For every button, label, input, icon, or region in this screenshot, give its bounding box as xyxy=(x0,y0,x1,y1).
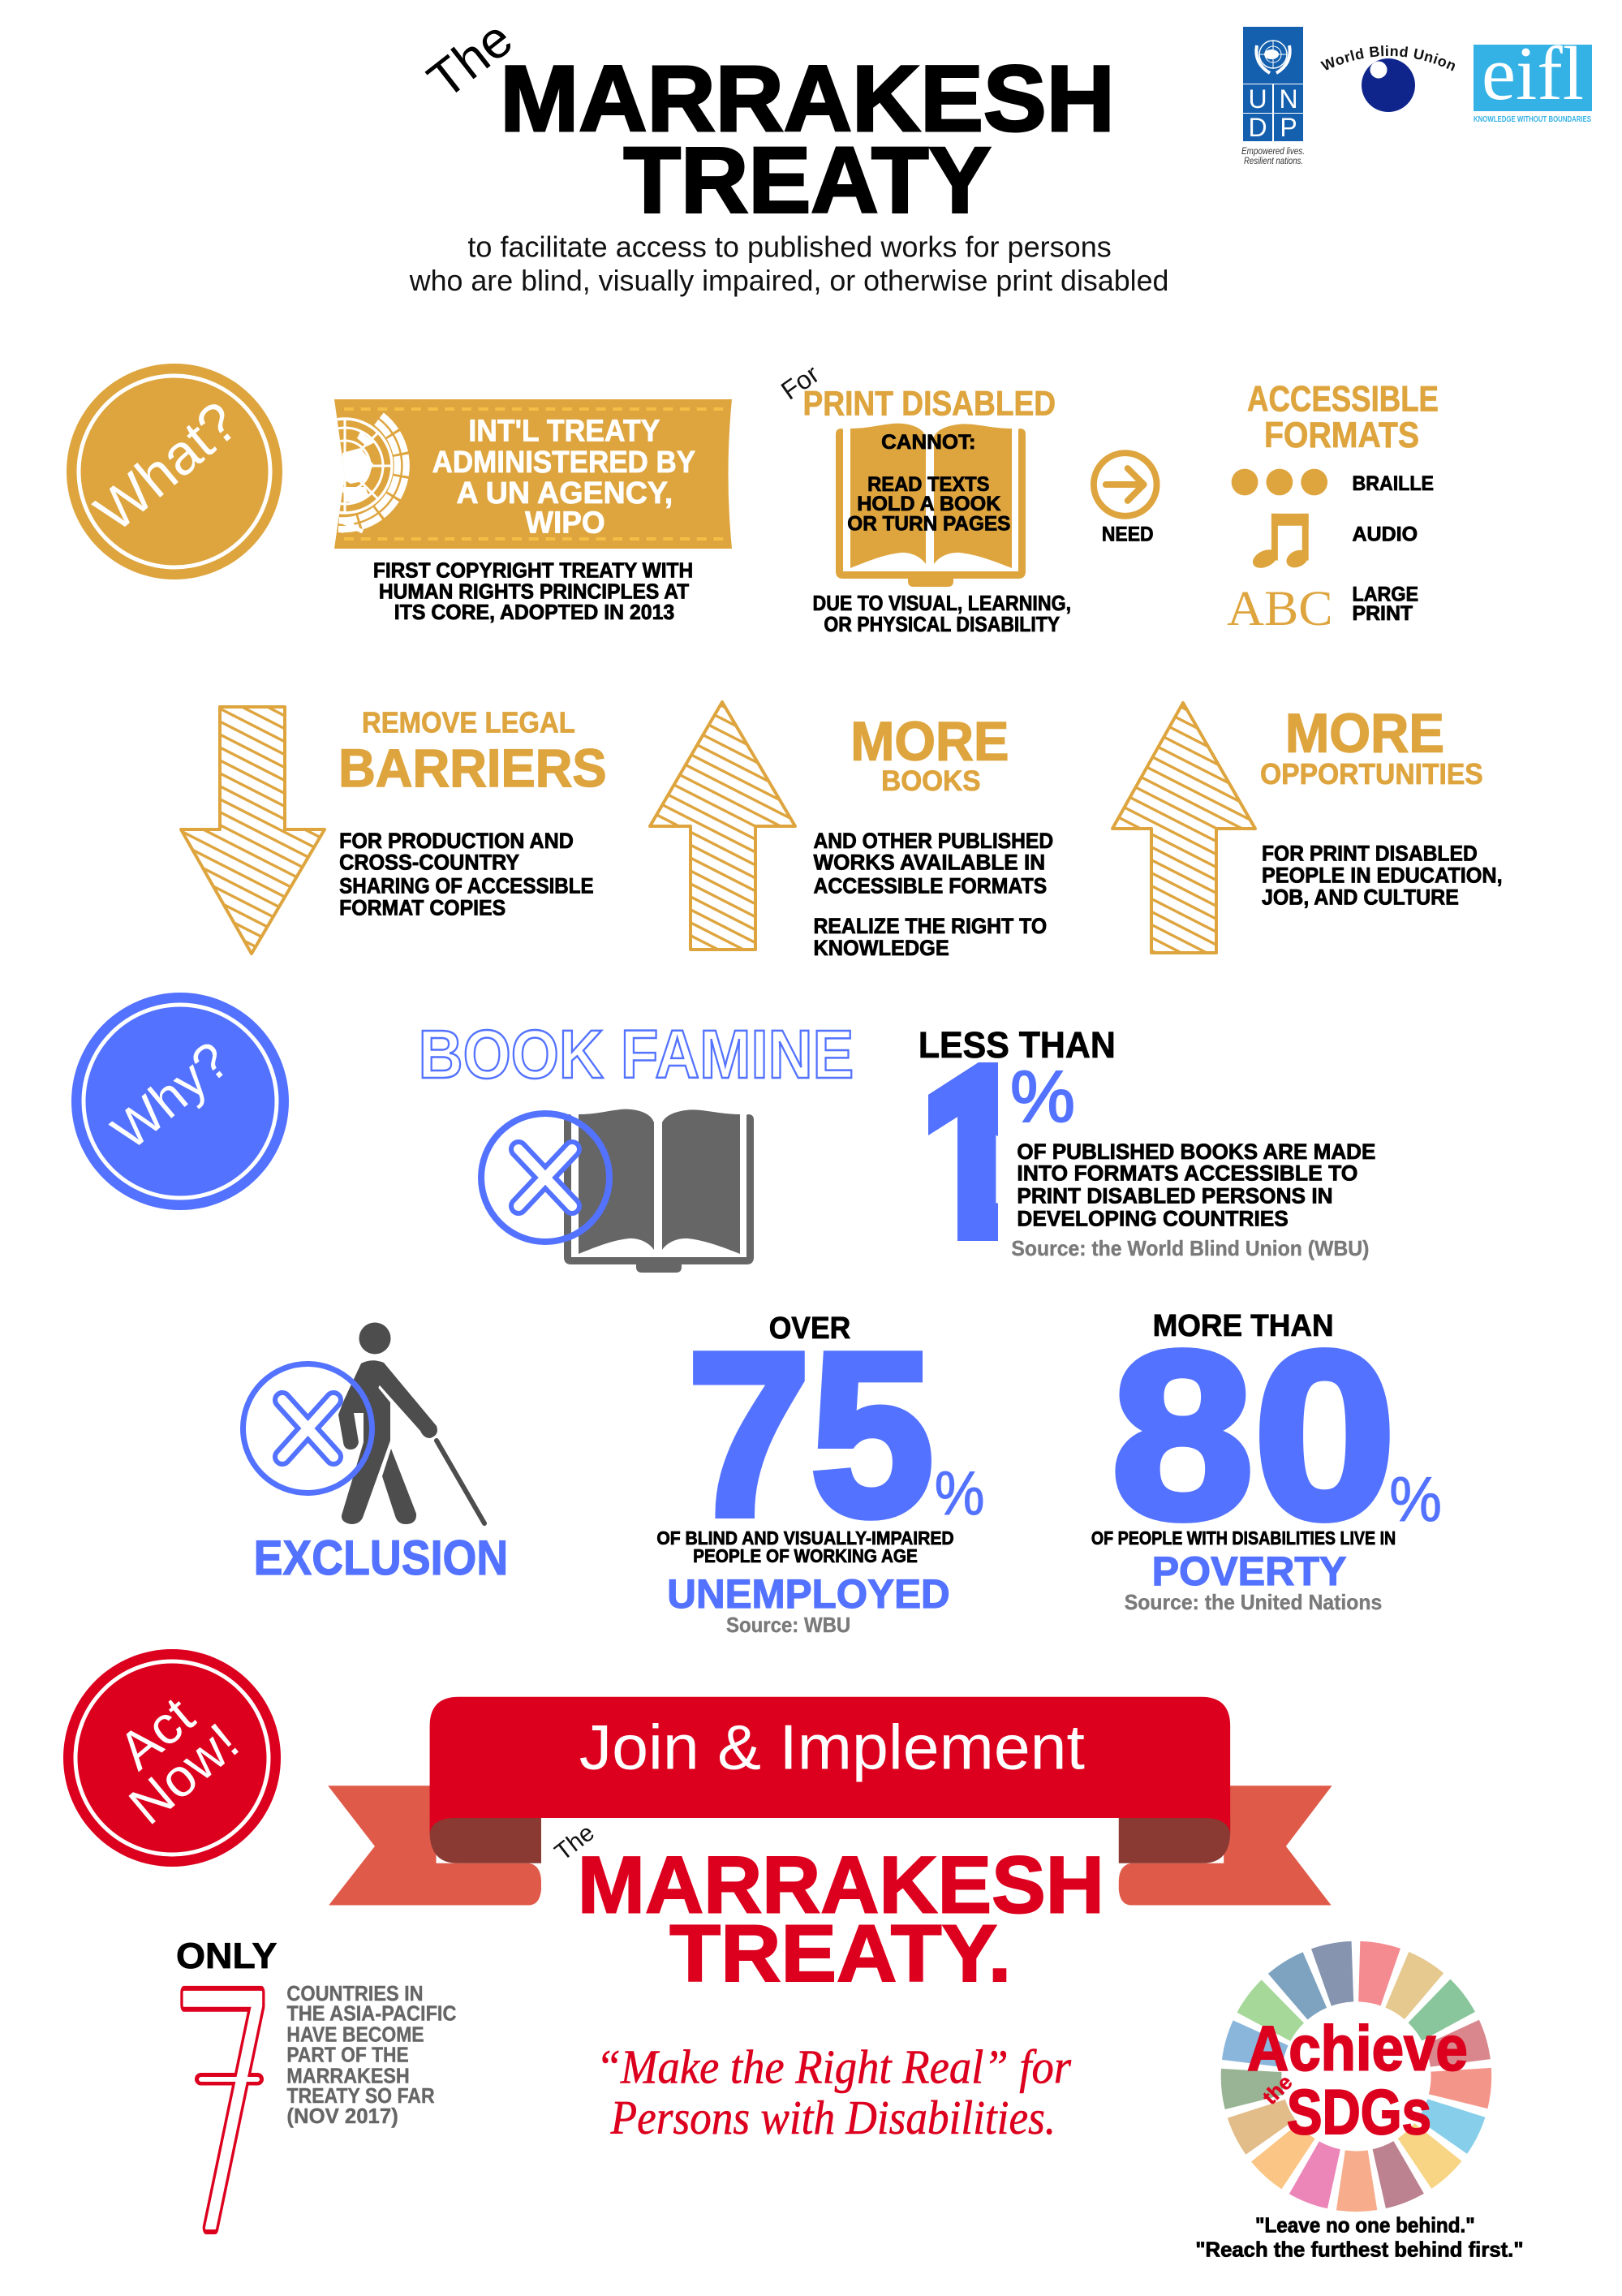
text: cannot list xyxy=(847,431,1010,536)
stat: 7 outlined: 7 xyxy=(170,1928,281,2296)
slogan: “Make the Right Real” for xyxy=(596,2040,1072,2093)
slogan: Persons with Disabilities. xyxy=(610,2091,1056,2144)
text: seven countries: PART OF THE xyxy=(286,2044,409,2066)
stat: 1 percent: % xyxy=(1010,1057,1075,1138)
ribbon text: ADMINISTERED BY xyxy=(432,446,695,480)
text: opportunities detail xyxy=(1262,842,1503,909)
text: cannot list: CANNOT: xyxy=(881,431,976,454)
subtitle xyxy=(409,230,1168,297)
logo: World Blind Union: World Blind Union xyxy=(1320,45,1456,71)
title red xyxy=(578,1840,1104,1999)
panel: act now xyxy=(63,1649,1524,2296)
text: seven countries: MARRAKESH xyxy=(286,2065,410,2087)
logo: UNDP: D xyxy=(1248,113,1267,142)
ribbon text: Join & Implement xyxy=(579,1712,1085,1782)
label: large print xyxy=(1352,583,1418,625)
ribbon text: INT'L TREATY xyxy=(468,414,660,448)
heading: remove legal barriers: REMOVE LEGAL xyxy=(362,706,575,739)
logo: UNDP: Resilient nations. xyxy=(1244,155,1303,166)
stat: 1 percent: 1 xyxy=(891,1013,1030,1294)
text: seven countries: COUNTRIES IN xyxy=(286,1983,424,2005)
stat: 80 percent: % xyxy=(1389,1465,1442,1535)
source: WBU: Source: the World Blind Union (WBU) xyxy=(1011,1238,1369,1260)
label: The small: The xyxy=(550,1819,600,1866)
heading: more books: BOOKS xyxy=(881,765,981,797)
source: United Nations: Source: the United Nations xyxy=(1125,1592,1382,1614)
stat: 7 outlined: 7 xyxy=(170,1928,281,2296)
heading: book famine: BOOK FAMINE xyxy=(419,1016,854,1092)
stat: 75 percent: 75 xyxy=(687,1305,934,1564)
panel: what xyxy=(67,359,1439,636)
text: copyright treaty note: ITS CORE, ADOPTED IN 2013 xyxy=(394,601,674,624)
text: copyright treaty note xyxy=(373,559,693,624)
text: seven countries: THE ASIA-PACIFIC xyxy=(286,2003,456,2026)
icon: music note xyxy=(1250,514,1311,571)
text: 75 detail: OF BLIND AND VISUALLY-IMPAIRED xyxy=(656,1527,954,1549)
heading: more opportunities: MORE xyxy=(1285,703,1444,764)
heading: accessible formats: ACCESSIBLE xyxy=(1247,378,1439,419)
badge: What?: What? xyxy=(83,390,250,544)
heading: remove legal barriers: BARRIERS xyxy=(338,739,607,798)
logo: UNDP: N xyxy=(1279,84,1298,114)
logo: EIFL: eifl xyxy=(1482,32,1584,116)
subtitle: who are blind, visually impaired, or otherwise print disabled xyxy=(409,265,1168,297)
text: opportunities detail: JOB, AND CULTURE xyxy=(1262,885,1459,909)
icon: UN emblem xyxy=(337,412,410,534)
arrow: up opportunities xyxy=(1112,703,1255,953)
text: books detail: AND OTHER PUBLISHED xyxy=(813,829,1053,853)
icon: X circle xyxy=(481,1114,609,1242)
text: due to disability: OR PHYSICAL DISABILITY xyxy=(824,614,1060,636)
panel: effects xyxy=(181,702,1503,960)
heading: accessible formats: FORMATS xyxy=(1264,415,1419,455)
text: 1 percent detail: OF PUBLISHED BOOKS ARE MADE xyxy=(1017,1139,1375,1164)
heading: unemployed: UNEMPLOYED xyxy=(667,1571,950,1617)
label: large print: PRINT xyxy=(1352,602,1413,625)
ribbon text xyxy=(432,414,695,541)
logo: UNDP: U xyxy=(1248,84,1267,114)
text: seven countries: (NOV 2017) xyxy=(286,2105,398,2128)
label: less than: LESS THAN xyxy=(919,1024,1116,1066)
text: barriers detail: CROSS-COUNTRY xyxy=(339,851,519,875)
text: barriers detail: SHARING OF ACCESSIBLE xyxy=(339,873,594,898)
text: copyright treaty note: HUMAN RIGHTS PRINCIPLES AT xyxy=(379,580,689,603)
text: seven countries xyxy=(286,1983,456,2128)
text: barriers detail: FORMAT COPIES xyxy=(339,895,506,920)
icon: open book grey xyxy=(564,1109,754,1273)
arrow: down xyxy=(181,707,325,954)
text: 75 detail xyxy=(656,1527,954,1566)
quote: "Leave no one behind." xyxy=(1255,2214,1475,2237)
source: WBU short: Source: WBU xyxy=(726,1614,850,1637)
logo: UNDP: Empowered lives. xyxy=(1241,145,1305,157)
heading: more opportunities: OPPORTUNITIES xyxy=(1260,758,1483,790)
ribbon text: A UN AGENCY, xyxy=(456,476,673,510)
logo: UNDP xyxy=(1241,27,1305,166)
label: need: NEED xyxy=(1102,523,1154,546)
heading: exclusion: EXCLUSION xyxy=(254,1531,508,1585)
badge: Act Now! xyxy=(63,1649,281,1867)
heading: more opportunities xyxy=(1260,703,1483,790)
stat: 75 percent: % xyxy=(935,1459,985,1528)
text: books detail: ACCESSIBLE FORMATS xyxy=(813,873,1047,898)
text: opportunities detail: FOR PRINT DISABLED xyxy=(1262,842,1478,866)
text: cannot list: READ TEXTS xyxy=(867,473,989,496)
text: 75 detail: PEOPLE OF WORKING AGE xyxy=(693,1545,918,1566)
text: cannot list: OR TURN PAGES xyxy=(847,513,1010,536)
quote: "Reach the furthest behind first." xyxy=(1195,2238,1524,2261)
heading: achieve the SDGs: the xyxy=(1258,2071,1297,2109)
badge: Why? xyxy=(71,993,289,1210)
text: due to disability xyxy=(812,592,1071,636)
heading: remove legal barriers xyxy=(338,706,607,798)
logos xyxy=(1241,27,1592,166)
heading: more books: MORE xyxy=(850,711,1009,772)
icon: person with cane xyxy=(338,1323,484,1524)
icon: open book gold xyxy=(836,424,1026,587)
text: 80 detail: OF PEOPLE WITH DISABILITIES LIVE IN xyxy=(1091,1527,1396,1549)
text: barriers detail xyxy=(339,829,594,920)
icon: braille dots xyxy=(1232,469,1327,495)
logo: World Blind Union xyxy=(1320,45,1456,112)
label: only: ONLY xyxy=(176,1936,278,1976)
heading: accessible formats xyxy=(1247,378,1439,455)
text: cannot list: HOLD A BOOK xyxy=(857,493,1000,515)
header xyxy=(409,10,1168,297)
icon: ABC large print: ABC xyxy=(1227,581,1333,636)
label: audio: AUDIO xyxy=(1352,523,1418,546)
text: due to disability: DUE TO VISUAL, LEARNING, xyxy=(812,592,1071,615)
title: Marrakesh: MARRAKESH xyxy=(500,46,1115,151)
text: barriers detail: FOR PRODUCTION AND xyxy=(339,829,574,853)
title red: MARRAKESH xyxy=(578,1840,1104,1930)
badge: Act Now!: Act xyxy=(107,1685,205,1781)
text: 1 percent detail: DEVELOPING COUNTRIES xyxy=(1017,1206,1289,1230)
slogan xyxy=(596,2040,1072,2144)
ribbon: treaty definition xyxy=(298,399,732,549)
icon: arrow circle need xyxy=(1094,453,1157,516)
label: over: OVER xyxy=(769,1312,850,1346)
heading: achieve the SDGs: Achieve xyxy=(1247,2014,1468,2083)
label: braille: BRAILLE xyxy=(1352,472,1434,495)
text: books detail xyxy=(813,829,1053,960)
title red: TREATY. xyxy=(669,1909,1011,1999)
stat: 1 percent xyxy=(928,1062,1073,1241)
text: books detail: REALIZE THE RIGHT TO xyxy=(813,914,1047,938)
chart: SDG wheel xyxy=(1207,1928,1504,2225)
heading: achieve the SDGs xyxy=(1247,2014,1468,2147)
icon: X circle exclusion xyxy=(243,1363,372,1493)
stat: 80 percent: 80 xyxy=(1112,1302,1396,1567)
badge: Act Now!: Now! xyxy=(118,1712,250,1836)
label: For: For xyxy=(776,359,824,406)
text: 1 percent detail xyxy=(1017,1139,1375,1230)
logo: UNDP: P xyxy=(1280,113,1297,142)
ribbon text: WIPO xyxy=(525,506,605,541)
quote xyxy=(1195,2214,1524,2261)
subtitle: to facilitate access to published works for persons xyxy=(467,230,1112,263)
text: seven countries: HAVE BECOME xyxy=(286,2024,424,2047)
heading: Print Disabled: PRINT DISABLED xyxy=(803,384,1056,423)
heading: achieve the SDGs: SDGs xyxy=(1287,2078,1431,2147)
heading: poverty: POVERTY xyxy=(1152,1549,1346,1594)
title: The: The xyxy=(417,10,523,110)
text: books detail: KNOWLEDGE xyxy=(813,936,949,960)
ribbon banner xyxy=(328,1697,1332,1905)
text: opportunities detail: PEOPLE IN EDUCATION, xyxy=(1262,864,1503,888)
panel: why xyxy=(71,993,1442,1637)
label: large print: LARGE xyxy=(1352,583,1418,605)
label: more than: MORE THAN xyxy=(1153,1309,1334,1343)
arrow: up books xyxy=(650,702,795,950)
text: 1 percent detail: PRINT DISABLED PERSONS IN xyxy=(1017,1184,1333,1208)
title: Treaty: TREATY xyxy=(624,128,991,233)
heading: more books xyxy=(850,711,1009,797)
badge: Why?: Why? xyxy=(101,1031,240,1161)
text: books detail: WORKS AVAILABLE IN xyxy=(813,851,1045,875)
text: seven countries: TREATY SO FAR xyxy=(286,2085,435,2108)
text: copyright treaty note: FIRST COPYRIGHT TREATY WITH xyxy=(373,559,693,582)
text: 1 percent detail: INTO FORMATS ACCESSIBLE TO xyxy=(1017,1161,1357,1186)
badge: What? xyxy=(67,364,282,579)
stat: 7 outlined xyxy=(170,1928,281,2296)
